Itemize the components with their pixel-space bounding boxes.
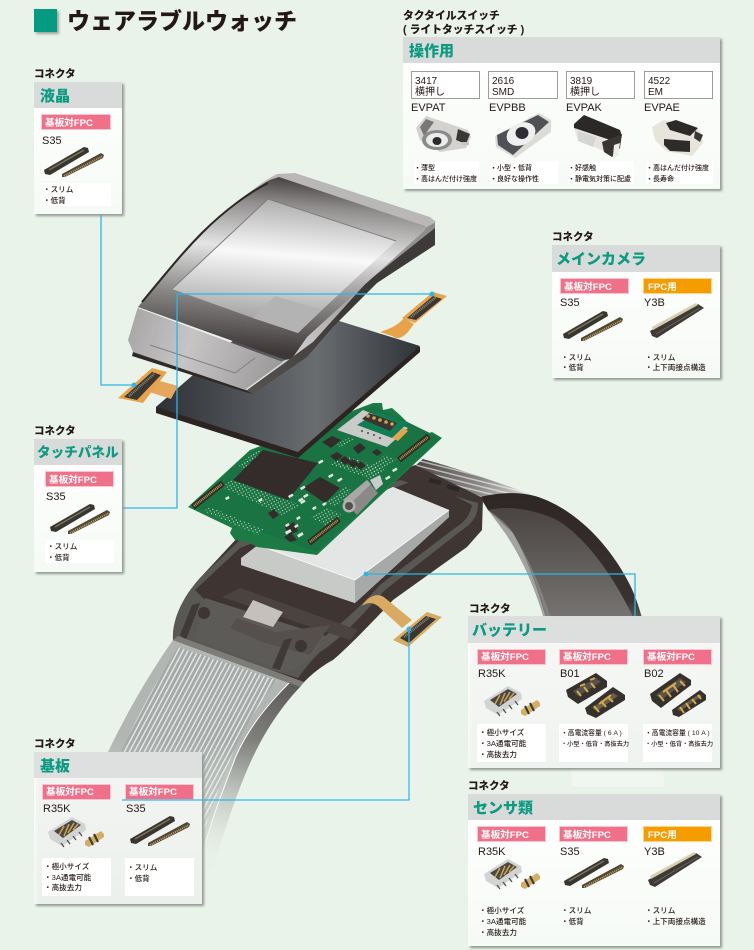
connector image: S35 bbox=[564, 858, 624, 888]
panel: 液晶 bbox=[34, 82, 124, 216]
main chip bbox=[233, 450, 318, 500]
label: connector (board): コネクタ bbox=[34, 737, 76, 750]
switch EVPAE: EM bbox=[648, 87, 663, 98]
connector image: R35K bbox=[484, 686, 540, 716]
switch EVPAT bbox=[411, 72, 480, 184]
rear strap bbox=[410, 459, 664, 787]
notes bbox=[125, 858, 194, 896]
connector image: R35K bbox=[48, 817, 104, 847]
callout line: battery bbox=[364, 572, 635, 617]
part name: R35K bbox=[478, 668, 506, 680]
tag bbox=[126, 784, 194, 800]
tag bbox=[478, 650, 546, 664]
switch EVPAK: ・好感触 bbox=[568, 163, 596, 172]
notes: ・スリム bbox=[561, 353, 592, 362]
label: tactile switch: タクタイルスイッチ bbox=[403, 8, 500, 22]
watch case bbox=[173, 465, 483, 687]
notes: ・スリム bbox=[645, 353, 676, 362]
notes bbox=[643, 724, 713, 762]
notes: ・高抜去力 bbox=[44, 882, 82, 892]
notes bbox=[561, 906, 592, 926]
solder dot fields bbox=[204, 437, 396, 535]
panel: バッテリー bbox=[468, 616, 722, 770]
battery flex connector bbox=[362, 595, 442, 647]
part name: R35K bbox=[478, 846, 506, 858]
switch EVPBB: SMD bbox=[492, 87, 514, 98]
switch EVPAE: ・長寿命 bbox=[646, 174, 674, 183]
tag bbox=[478, 826, 546, 842]
heading: メインカメラ: メインカメラ bbox=[556, 251, 646, 268]
notes: ・スリム bbox=[561, 906, 592, 915]
switch EVPBB: 2616 bbox=[492, 76, 515, 87]
battery bbox=[241, 487, 449, 603]
connector image: S35 bbox=[563, 311, 623, 341]
connector image: S35 bbox=[50, 504, 110, 534]
notes: ・低背 bbox=[127, 873, 150, 883]
heading: 操作用: 操作用 bbox=[409, 42, 454, 60]
part name: Y3B bbox=[644, 297, 665, 309]
notes bbox=[41, 183, 111, 206]
tag bbox=[560, 278, 628, 294]
notes: ・低背 bbox=[43, 195, 66, 205]
notes: ・低背 bbox=[561, 916, 584, 926]
label: connector (main camera): コネクタ bbox=[552, 230, 594, 243]
notes: ・極小サイズ bbox=[479, 905, 525, 915]
tag: 基板対FPC bbox=[45, 117, 93, 129]
part name: S35 bbox=[46, 491, 66, 503]
tag: 基板対FPC bbox=[49, 474, 97, 486]
notes bbox=[645, 353, 706, 372]
LCD flex connector bbox=[118, 368, 178, 403]
notes bbox=[645, 906, 706, 926]
switch EVPAE: EVPAE bbox=[644, 102, 680, 114]
connector image: B02 bbox=[650, 673, 706, 717]
part name: Y3B bbox=[644, 846, 665, 858]
tag: 基板対FPC bbox=[481, 651, 529, 663]
black touch panel bbox=[156, 302, 420, 458]
switch EVPAK: 3819 bbox=[570, 76, 593, 87]
board connectors bbox=[193, 436, 429, 543]
notes: ・小型・低背・高抜去力 bbox=[561, 740, 629, 748]
watch top case bbox=[128, 173, 436, 394]
tag: 基板対FPC bbox=[481, 829, 529, 841]
tag bbox=[560, 826, 628, 842]
heading: 基板: 基板 bbox=[40, 757, 70, 775]
notes bbox=[561, 353, 592, 372]
label: connector (sensors): コネクタ bbox=[468, 779, 510, 792]
part name: S35 bbox=[126, 803, 146, 815]
notes: ・低背 bbox=[47, 552, 70, 562]
switch EVPBB: EVPBB bbox=[489, 102, 526, 114]
panel: センサ類 bbox=[468, 794, 722, 948]
tag: FPC用 bbox=[648, 830, 677, 841]
connector image: B01 bbox=[566, 673, 625, 718]
switch EVPAK: 横押し bbox=[570, 85, 600, 98]
notes: ・上下両接点構造 bbox=[645, 916, 706, 926]
tag bbox=[644, 826, 712, 842]
tag bbox=[560, 650, 628, 664]
touch panel flex connector bbox=[380, 292, 447, 338]
camera module bbox=[342, 475, 383, 515]
connector image: Y3B bbox=[648, 852, 702, 887]
tag: 基板対FPC bbox=[563, 829, 611, 841]
label: connector (LCD): コネクタ bbox=[34, 67, 76, 80]
tag: 基板対FPC bbox=[46, 786, 94, 798]
switch EVPAE bbox=[644, 72, 713, 184]
callout line: LCD bbox=[101, 206, 136, 387]
notes: ・スリム bbox=[645, 906, 676, 915]
heading: バッテリー: バッテリー bbox=[472, 622, 547, 639]
panel: メインカメラ bbox=[552, 245, 722, 380]
heading: 液晶: 液晶 bbox=[40, 87, 70, 105]
notes: ・3A通電可能 bbox=[479, 738, 527, 748]
notes: ・3A通電可能 bbox=[479, 916, 527, 926]
illustration: exploded wearable watch bbox=[62, 173, 664, 905]
part name: S35 bbox=[560, 297, 580, 309]
part name: S35 bbox=[42, 135, 62, 147]
notes bbox=[42, 858, 111, 896]
callout line: board bbox=[122, 627, 411, 800]
tag: 基板対FPC bbox=[564, 281, 612, 293]
notes: ・高抜去力 bbox=[479, 927, 517, 937]
tag: 基板対FPC bbox=[563, 651, 611, 663]
switch EVPAT: EVPAT bbox=[411, 102, 446, 114]
part name: B01 bbox=[560, 668, 580, 680]
switch EVPAE: 4522 bbox=[648, 76, 671, 87]
switch EVPBB bbox=[488, 72, 558, 184]
connector image: S35 bbox=[130, 816, 190, 846]
label: connector (touch panel): コネクタ bbox=[34, 424, 76, 437]
tag bbox=[42, 784, 110, 800]
notes bbox=[477, 724, 546, 762]
silver shield and pin module bbox=[337, 410, 408, 447]
switch EVPAT: 横押し bbox=[415, 85, 445, 98]
switch EVPBB: ・小型・低背 bbox=[490, 163, 532, 172]
part name: S35 bbox=[560, 846, 580, 858]
notes: ・スリム bbox=[127, 863, 158, 872]
notes: ・高電流容量 ( 6 A ) bbox=[561, 728, 622, 737]
tag: 基板対FPC bbox=[129, 786, 177, 798]
callout line: touch panel bbox=[122, 292, 434, 508]
heading: タッチパネル: タッチパネル bbox=[37, 444, 119, 460]
title: ウェアラブルウォッチ bbox=[67, 8, 297, 34]
switch EVPAE: ・高はんだ付け強度 bbox=[646, 163, 709, 172]
notes: ・スリム bbox=[43, 185, 74, 194]
panel: 基板 bbox=[34, 752, 204, 906]
notes: ・上下両接点構造 bbox=[645, 362, 706, 372]
switch EVPBB: ・良好な操作性 bbox=[490, 174, 539, 183]
notes bbox=[45, 540, 114, 563]
switch EVPAT: 3417 bbox=[415, 76, 438, 87]
switch EVPAK bbox=[566, 72, 634, 184]
connector image: Y3B bbox=[650, 303, 704, 338]
notes: ・高電流容量 ( 10 A ) bbox=[645, 728, 710, 737]
notes bbox=[559, 724, 629, 762]
switch EVPAT: ・薄型 bbox=[414, 163, 435, 172]
front strap bbox=[108, 640, 300, 844]
switch EVPAT: ・高はんだ付け強度 bbox=[414, 174, 477, 183]
panel: タッチパネル bbox=[34, 439, 124, 574]
notes bbox=[479, 905, 527, 937]
tag bbox=[644, 278, 712, 294]
circuit board bbox=[188, 403, 442, 555]
notes: ・極小サイズ bbox=[44, 861, 90, 871]
notes: ・極小サイズ bbox=[479, 727, 525, 737]
part name: B02 bbox=[644, 668, 664, 680]
tag: FPC用 bbox=[648, 282, 677, 293]
connector image: S35 bbox=[44, 147, 104, 177]
label: connector (battery): コネクタ bbox=[469, 602, 511, 615]
tag bbox=[644, 650, 712, 664]
panel: 操作用 bbox=[403, 37, 722, 191]
tag: 基板対FPC bbox=[647, 651, 695, 663]
notes: ・スリム bbox=[47, 542, 78, 551]
connector image: R35K bbox=[484, 859, 540, 889]
notes: ・小型・低背・高抜去力 bbox=[645, 740, 713, 748]
label: tactile switch bbox=[403, 8, 525, 36]
switch EVPAK: ・静電気対策に配慮 bbox=[568, 174, 631, 183]
notes: ・3A通電可能 bbox=[44, 872, 92, 882]
notes: ・高抜去力 bbox=[479, 749, 517, 759]
heading: センサ類: センサ類 bbox=[473, 799, 533, 817]
label: tactile switch: ( ライトタッチスイッチ ) bbox=[403, 22, 525, 36]
switch EVPAK: EVPAK bbox=[566, 102, 603, 114]
part name: R35K bbox=[43, 803, 71, 815]
notes: ・低背 bbox=[561, 362, 584, 372]
